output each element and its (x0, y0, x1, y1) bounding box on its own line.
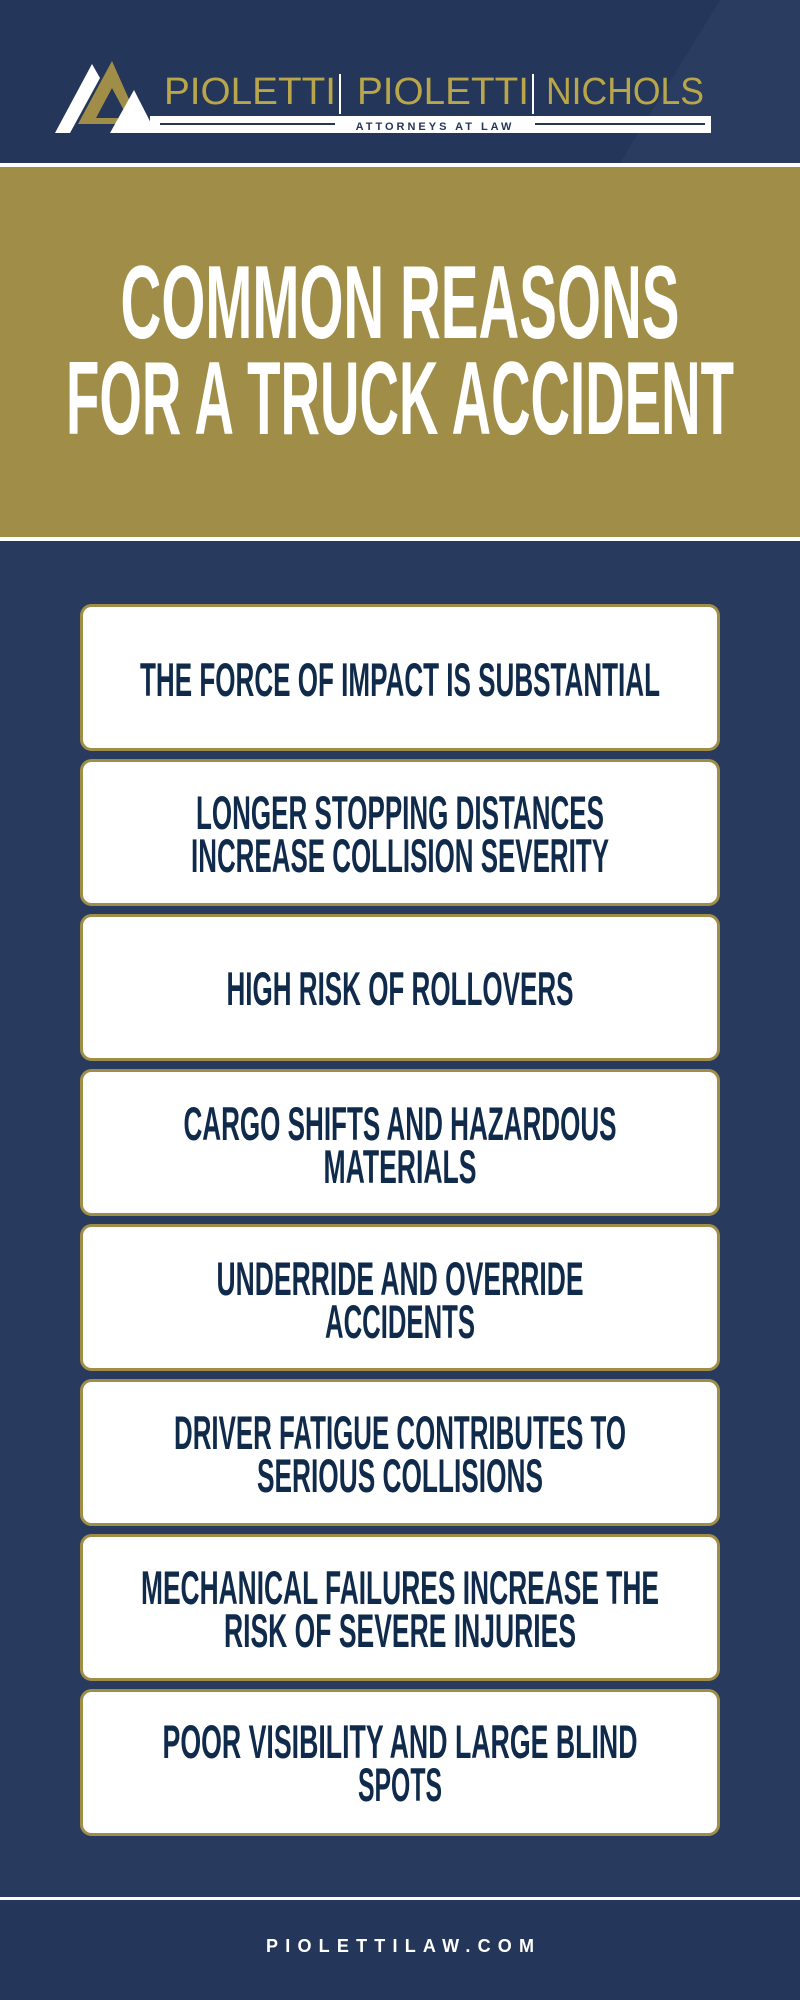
logo: NICHOLS (546, 71, 704, 113)
footer: PIOLETTILAW.COM (266, 1936, 534, 1956)
box 8: SPOTS (358, 1758, 442, 1811)
box 6 (82, 1380, 718, 1524)
title band (0, 167, 800, 537)
box 6: SERIOUS COLLISIONS (257, 1449, 543, 1502)
box 3 (82, 916, 718, 1060)
box 4 (82, 1070, 718, 1214)
list of reasons (82, 606, 718, 1834)
logo: ATTORNEYS AT LAW (356, 121, 514, 133)
box 1 (82, 606, 718, 750)
footer (0, 1897, 800, 2000)
header background (0, 0, 800, 163)
logo: PIOLETTI (357, 71, 529, 113)
box 7 (82, 1536, 718, 1680)
box 5: ACCIDENTS (325, 1295, 475, 1348)
box 2 (82, 760, 718, 904)
logo (55, 61, 711, 133)
box 8 (82, 1690, 718, 1834)
box 5 (82, 1226, 718, 1370)
logo text: PIOLETTI (164, 71, 336, 113)
box 4: MATERIALS (324, 1140, 476, 1193)
icon: logo triangles (55, 61, 156, 133)
title (66, 245, 734, 457)
